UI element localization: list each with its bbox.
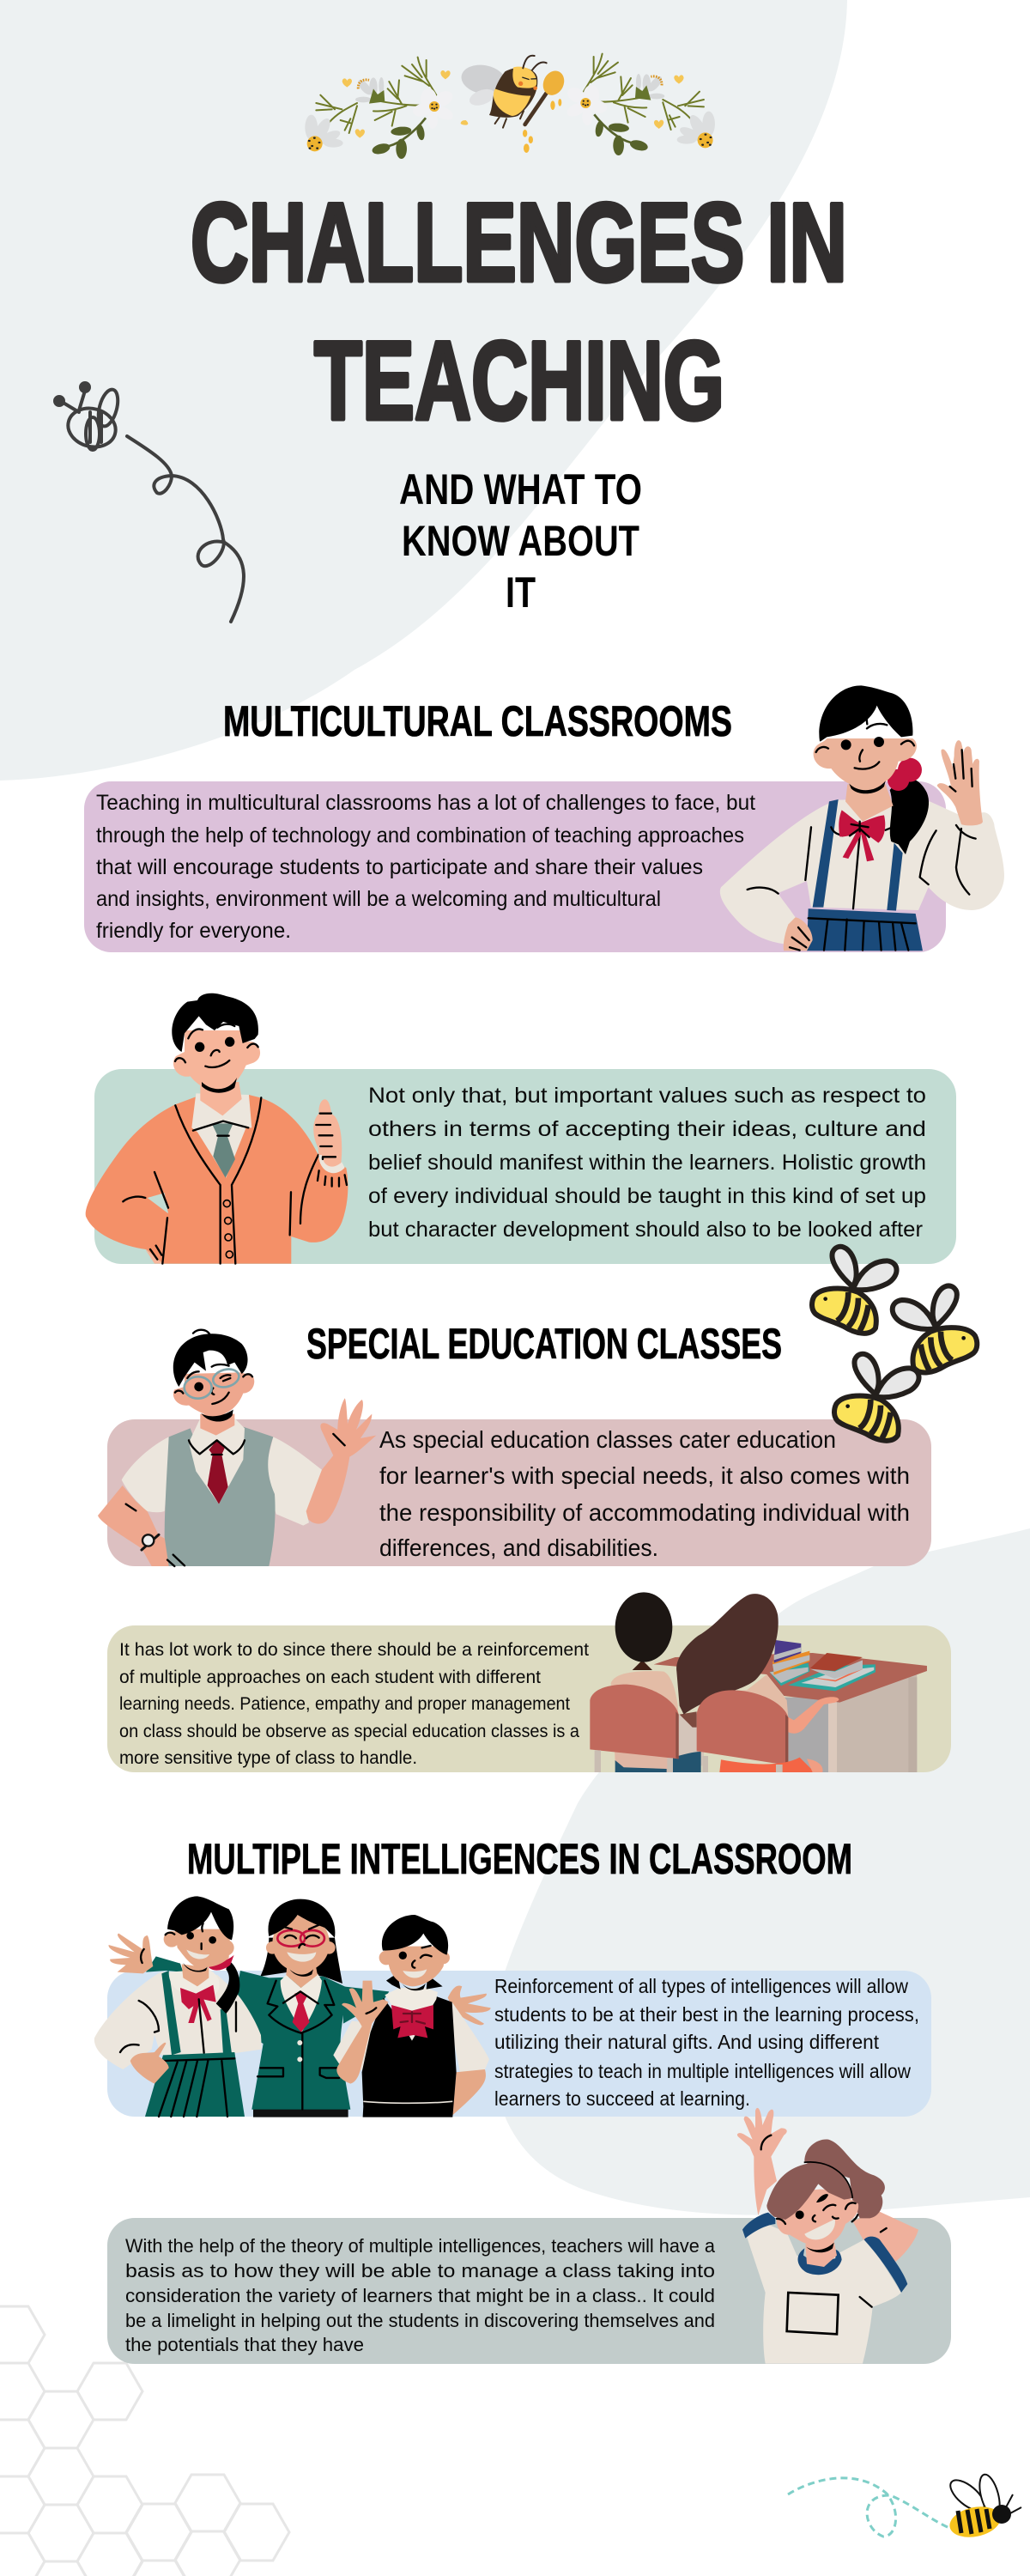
text: values <box>368 1084 926 1242</box>
background blob: top <box>0 0 847 781</box>
title: TEACHING <box>314 318 724 443</box>
icon: bee one <box>812 1247 897 1334</box>
text: special education intro: differences, and disabilities. <box>379 1534 658 1561</box>
text: reinforcement: strategies to teach in multiple intelligences will allow <box>494 2060 911 2082</box>
text: special education workload: learning needs. Patience, empathy and proper management <box>119 1694 570 1714</box>
text: values: others in terms of accepting their ideas, culture and <box>368 1117 926 1141</box>
text: theory: consideration the variety of learners that might be in a class.. It could <box>125 2285 715 2306</box>
text: multicultural intro <box>96 791 755 943</box>
panel: multicultural intro <box>84 781 946 952</box>
icon: yellow bee <box>946 2472 1021 2542</box>
text: multicultural intro: that will encourage students to participate and share their values <box>96 855 703 879</box>
panel: theory of multiple intelligences <box>107 2218 951 2364</box>
floral bee ornament <box>305 54 715 159</box>
character: thumbs-up boy <box>86 993 348 1264</box>
text: special education workload: of multiple approaches on each student with different <box>119 1668 541 1687</box>
icon: dashed bee trail <box>788 2478 949 2537</box>
illustration: students at desk <box>590 1592 927 1772</box>
icon: right floral spray <box>565 54 715 155</box>
character: student in jacket <box>234 1899 389 2117</box>
text: reinforcement <box>494 1975 919 2110</box>
character: waving girl <box>720 685 1004 951</box>
text: special education workload: It has lot work to do since there should be a reinforcement <box>119 1640 589 1660</box>
text: multicultural intro: and insights, environment will be a welcoming and multicultural <box>96 887 661 911</box>
icon: bee three <box>834 1354 919 1441</box>
text: multicultural intro: friendly for everyone. <box>96 919 291 943</box>
text: special education workload: on class should be observe as special education classes is a <box>119 1722 579 1741</box>
text: theory: the potentials that they have <box>125 2334 364 2355</box>
subtitle: AND WHAT TO <box>399 465 642 513</box>
icon: left floral spray <box>305 58 455 159</box>
text: special education intro: the responsibility of accommodating individual with <box>379 1499 910 1526</box>
text: values: of every individual should be taught in this kind of set up <box>368 1184 926 1208</box>
character: student with pigtail <box>94 1896 262 2117</box>
text: theory: be a limelight in helping out the students in discovering themselves and <box>125 2310 715 2331</box>
text: reinforcement: utilizing their natural gifts. And using different <box>494 2031 880 2053</box>
icon: scribble bee with flight path <box>55 383 244 622</box>
subtitle: IT <box>506 568 536 617</box>
text: multicultural intro: through the help of technology and combination of teaching approaches <box>96 823 744 848</box>
heading: special education classes: SPECIAL EDUCATION CLASSES <box>306 1320 782 1368</box>
text: special education workload: more sensitive type of class to handle. <box>119 1748 417 1768</box>
text: reinforcement: learners to succeed at learning. <box>494 2087 750 2110</box>
text: special education intro: As special education classes cater education <box>379 1426 836 1453</box>
panel: special education workload <box>107 1625 951 1772</box>
text: values: but character development should also to be looked after <box>368 1218 923 1242</box>
text: theory: basis as to how they will be able to manage a class taking into <box>125 2260 715 2281</box>
text: values: belief should manifest within the learners. Holistic growth <box>368 1151 926 1175</box>
panel: special education intro <box>107 1419 931 1566</box>
icon: bee with honey dipper <box>459 56 568 153</box>
characters: three students <box>94 1896 491 2117</box>
character: winking student in vest <box>333 1915 491 2117</box>
character: waving student <box>737 2108 918 2364</box>
text: theory: With the help of the theory of multiple intelligences, teachers will have a <box>125 2235 716 2257</box>
icon: bee two <box>893 1285 977 1372</box>
text: special education intro: for learner's with special needs, it also comes with <box>379 1462 910 1489</box>
heading: multicultural classrooms: MULTICULTURAL CLASSROOMS <box>223 697 732 745</box>
panel: multiple intelligences reinforcement <box>107 1971 931 2117</box>
text: theory <box>125 2235 716 2355</box>
title <box>191 179 847 443</box>
character: winking boy with glasses <box>98 1330 376 1566</box>
text: special education workload <box>119 1640 589 1768</box>
text: values: Not only that, but important values such as respect to <box>368 1084 926 1108</box>
background blob: lower right <box>492 1528 1030 2215</box>
text: multicultural intro: Teaching in multicultural classrooms has a lot of challenges to face, but <box>96 791 755 815</box>
text: reinforcement: Reinforcement of all types of intelligences will allow <box>494 1975 908 1997</box>
subtitle: KNOW ABOUT <box>402 517 639 565</box>
text: special education intro <box>379 1426 910 1561</box>
panel: values <box>94 1069 956 1264</box>
hexagon pattern <box>0 2306 289 2576</box>
text: reinforcement: students to be at their best in the learning process, <box>494 2003 919 2026</box>
subtitle <box>399 465 642 617</box>
